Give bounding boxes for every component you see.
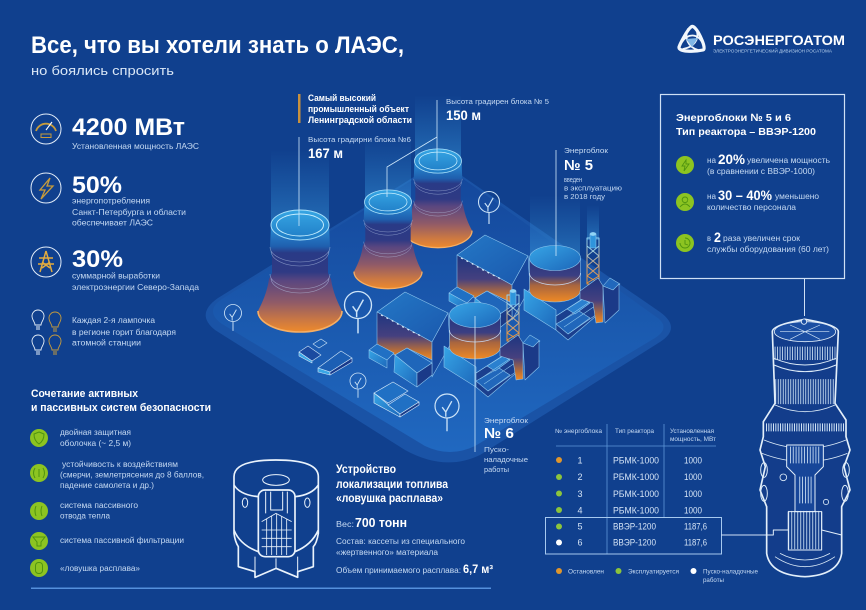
icon: core catcher device	[234, 460, 318, 577]
tree	[344, 292, 372, 333]
heading: Сочетание активных	[31, 388, 139, 400]
small stepped structure	[374, 382, 419, 417]
label: unit № 6	[475, 316, 529, 474]
tree	[350, 373, 366, 398]
table header: Тип реактора	[615, 429, 655, 435]
table header	[555, 428, 716, 443]
item: resistance to impacts	[30, 460, 204, 490]
light bulbs fact: Каждая 2-я лампочка	[72, 316, 156, 325]
cars	[299, 339, 352, 375]
item: passive filtration: система пассивной фильтрации	[60, 536, 184, 545]
fact: service life: в	[707, 234, 711, 243]
table grid	[556, 424, 716, 554]
icon: lightning	[31, 173, 61, 203]
label: unit № 5: в эксплуатацию	[564, 186, 622, 192]
tree	[435, 394, 459, 431]
stat: 50%	[31, 172, 186, 228]
item: passive heat removal	[30, 501, 139, 520]
power unit № 5 buildings	[449, 232, 620, 340]
tower height callouts: Высота градирни блока №6	[308, 135, 411, 144]
tree	[478, 192, 500, 224]
table rows: 1000	[684, 472, 702, 482]
item: double containment: оболочка (~ 2,5 м)	[60, 439, 131, 448]
text: core catcher description: 6,7 м³	[463, 564, 493, 576]
fact: power: увеличена мощность	[747, 156, 830, 165]
icon: gauge	[31, 114, 61, 144]
table rows: 1000	[684, 489, 702, 499]
fact: service life: 2	[714, 229, 721, 245]
label: unit № 6: № 6	[484, 426, 514, 442]
label: unit № 5	[556, 147, 622, 256]
label: unit № 6: Энергоблок	[484, 417, 529, 425]
reactor vessel	[760, 319, 850, 577]
cooling tower: block 5 front	[354, 190, 422, 289]
label: unit № 5: Энергоблок	[564, 147, 609, 155]
stat: 30%	[31, 246, 199, 292]
item: core catcher	[30, 559, 141, 577]
table rows: 2	[577, 472, 583, 482]
isometric plant platform	[206, 166, 671, 462]
text: core catcher description: Состав: кассеты из специального	[336, 537, 466, 546]
stat: 50%: обеспечивает ЛАЭС	[72, 218, 153, 228]
table rows: РБМК-1000	[613, 506, 659, 516]
item: double containment	[30, 428, 131, 448]
light bulbs fact	[32, 310, 176, 354]
legend: Остановлен	[568, 570, 604, 576]
tower height callouts: промышленный объект	[308, 104, 410, 114]
stat: 30%: 30%	[72, 246, 123, 273]
heading	[31, 388, 211, 414]
fact: personnel: на	[707, 192, 717, 201]
table header: мощность, МВт	[670, 437, 716, 443]
legend	[556, 568, 759, 584]
text: core catcher description: Объем принимаемого расплава:	[336, 566, 461, 575]
highlight box for units 5 and 6	[546, 518, 722, 554]
table: power units	[546, 424, 759, 584]
item: passive filtration	[30, 532, 184, 550]
stat: 50%: энергопотребления	[72, 196, 150, 206]
tower height callouts: 150 м	[446, 107, 481, 123]
icon: four bulbs	[32, 310, 61, 354]
table rows: 4	[577, 506, 583, 516]
legend: Эксплуатируется	[628, 570, 679, 576]
bottom divider	[31, 588, 491, 589]
logo: Росэнергоатом: РОСЭНЕРГОАТОМ	[713, 33, 845, 48]
title	[31, 32, 404, 78]
label: unit № 5: в 2018 году	[564, 194, 606, 201]
text: core catcher description: 700 тонн	[355, 515, 407, 530]
fact: service life: службы оборудования (60 лет)	[707, 245, 829, 254]
stat: 30%: электроэнергии Северо-Запада	[72, 282, 199, 292]
fact: power: (в сравнении с ВВЭР-1000)	[707, 167, 815, 176]
panel heading: Энергоблоки № 5 и 6	[676, 112, 791, 124]
heading: и пассивных систем безопасности	[31, 402, 211, 414]
table rows: 1187,6	[684, 522, 707, 532]
power unit № 6 buildings	[369, 289, 540, 397]
fact: power	[676, 152, 830, 176]
table header: № энергоблока	[555, 428, 603, 435]
text: core catcher description: Устройство	[336, 464, 396, 476]
title: но боялись спросить	[31, 64, 174, 78]
fact: power: 20%	[718, 152, 745, 167]
stat: 4200 МВт: Установленная мощность ЛАЭС	[72, 141, 199, 151]
light beams above towers and reactors	[271, 95, 599, 290]
legend: работы	[703, 578, 724, 584]
light bulbs fact: атомной станции	[72, 338, 141, 348]
item: resistance to impacts: устойчивость к воздействиям	[62, 460, 178, 469]
table rows: 6	[577, 538, 583, 548]
tower height callouts: Самый высокий	[308, 93, 376, 103]
fact: power: на	[707, 156, 717, 165]
legend: Пуско-наладочные	[703, 570, 759, 576]
table rows: РБМК-1000	[613, 489, 659, 499]
fact: personnel: 30 – 40%	[718, 188, 772, 203]
table rows: 5	[577, 522, 583, 532]
tower height callouts: Высота градирен блока № 5	[446, 97, 549, 106]
panel: units 5 and 6	[660, 94, 844, 278]
fact: service life: раза увеличен срок	[723, 234, 801, 243]
item: resistance to impacts: падение самолета и др.)	[60, 481, 154, 490]
stat: 50%: Санкт-Петербурга и области	[72, 207, 186, 217]
title: Все, что вы хотели знать о ЛАЭС,	[31, 32, 404, 59]
label: unit № 5: введен	[564, 177, 582, 184]
text: core catcher description	[336, 464, 493, 576]
fact: personnel: уменьшено	[775, 192, 820, 201]
table rows	[556, 456, 707, 548]
item: resistance to impacts: (смерчи, землетрясения до 8 баллов,	[60, 470, 204, 480]
table rows: 1000	[684, 456, 702, 466]
label: unit № 6: Пуско-	[484, 447, 510, 454]
fact: personnel	[676, 188, 820, 212]
table rows: РБМК-1000	[613, 472, 659, 482]
stat: 30%: суммарной выработки	[72, 270, 160, 280]
fact: service life	[676, 229, 829, 254]
item: core catcher: «ловушка расплава»	[60, 564, 141, 573]
stat: 4200 МВт	[31, 114, 199, 151]
table rows: 1	[577, 456, 583, 466]
table rows: 1000	[684, 506, 702, 516]
label: unit № 6: наладочные	[484, 457, 528, 464]
panel heading: Тип реактора – ВВЭР-1200	[676, 126, 816, 138]
text: core catcher description: «жертвенного» материала	[336, 548, 439, 557]
connector lines to reactor	[721, 278, 804, 535]
icon: power pylon	[31, 247, 61, 277]
table rows: ВВЭР-1200	[613, 538, 656, 548]
table header: Установленная	[670, 429, 714, 435]
cooling tower: block 5 rear	[404, 149, 472, 248]
text: core catcher description: «ловушка расплава»	[336, 493, 443, 505]
item: double containment: двойная защитная	[60, 428, 131, 437]
tree	[224, 304, 242, 331]
panel heading	[676, 112, 816, 138]
light bulbs fact: в регионе горит благодаря	[72, 328, 176, 337]
fact: personnel: количество персонала	[707, 203, 797, 212]
tower height callouts: Ленинградской области	[308, 115, 412, 125]
tower height callouts: 167 м	[308, 145, 343, 161]
cooling tower: block 6	[258, 210, 342, 332]
panel: safety systems	[30, 388, 211, 577]
stat: 50%: 50%	[72, 172, 122, 199]
label: unit № 6: работы	[484, 466, 509, 474]
logo: Росэнергоатом: ЭЛЕКТРОЭНЕРГЕТИЧЕСКИЙ ДИВИЗИОН РОСАТОМА	[713, 46, 833, 54]
label: unit № 5: № 5	[564, 158, 593, 174]
item: passive heat removal: система пассивного	[60, 501, 139, 510]
table rows: ВВЭР-1200	[613, 522, 656, 532]
table rows: 3	[577, 489, 583, 499]
item: passive heat removal: отвода тепла	[60, 512, 111, 520]
stat: 4200 МВт: 4200 МВт	[72, 114, 185, 141]
table rows: РБМК-1000	[613, 456, 659, 466]
text: core catcher description: Вес:	[336, 519, 354, 529]
logo: Росэнергоатом	[679, 26, 845, 54]
table rows: 1187,6	[684, 538, 707, 548]
tower height callouts	[298, 93, 549, 226]
text: core catcher description: локализации топлива	[336, 479, 449, 491]
